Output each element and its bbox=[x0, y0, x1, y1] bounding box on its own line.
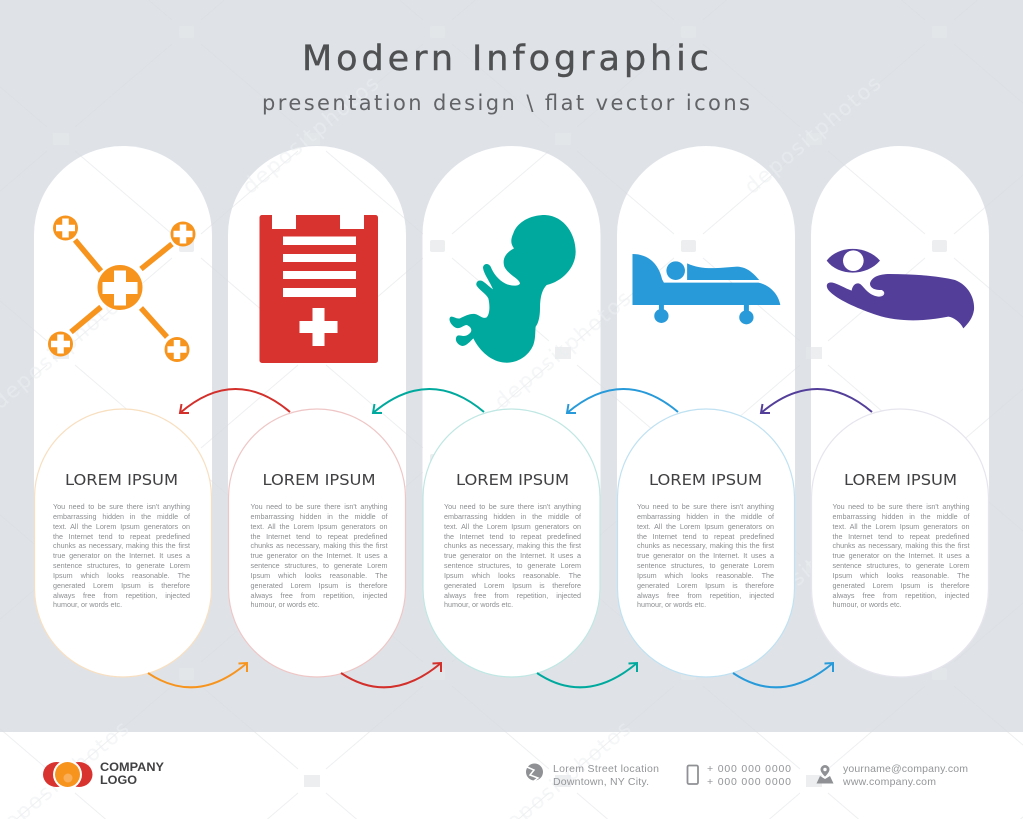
paragraph 3: humour, or words etc. bbox=[444, 600, 513, 609]
heading 5: LOREM IPSUM bbox=[844, 471, 957, 489]
arrow: teal forward bbox=[537, 663, 637, 687]
paragraph 2 bbox=[250, 502, 388, 609]
paragraph 3: the Internet tend to repeat predefined bbox=[444, 532, 581, 541]
paragraph 2: generated Lorem Ipsum is therefore bbox=[250, 581, 388, 590]
paragraph 5: humour, or words etc. bbox=[832, 600, 902, 609]
paragraph 3: Ipsum which looks reasonable. The bbox=[444, 571, 581, 580]
paragraph 1: sentence structures, to generate Lorem bbox=[53, 561, 190, 570]
paragraph 5 bbox=[832, 502, 970, 609]
paragraph 5: You need to be sure there isn't anything bbox=[832, 502, 970, 511]
text pill 5 bbox=[812, 409, 988, 677]
company logo bbox=[43, 760, 164, 789]
paragraph 1: Ipsum which looks reasonable. The bbox=[53, 571, 190, 580]
paragraph 3: sentence structures, to generate Lorem bbox=[444, 561, 581, 570]
text pill 1 bbox=[34, 409, 212, 677]
paragraph 4: the Internet tend to repeat predefined bbox=[637, 532, 774, 541]
address block: Lorem Street location bbox=[553, 763, 659, 775]
paragraph 1: humour, or words etc. bbox=[53, 600, 122, 609]
paragraph 4: sentence structures, to generate Lorem bbox=[637, 561, 774, 570]
text pill 4 bbox=[618, 409, 794, 677]
arrow: red back bbox=[180, 389, 290, 413]
text pill 2 bbox=[228, 409, 406, 677]
paragraph 5: sentence structures, to generate Lorem bbox=[832, 561, 970, 570]
text: depositphotos bbox=[740, 71, 885, 199]
paragraph 4: You need to be sure there isn't anything bbox=[637, 502, 774, 511]
arrow: orange forward bbox=[148, 663, 247, 687]
arrow: teal back bbox=[373, 389, 484, 413]
paragraph 3: true generator on the Internet. It uses a bbox=[444, 551, 581, 560]
paragraph 4: text. All the Lorem Ipsum generators on bbox=[637, 522, 774, 531]
paragraph 4: embarrassing hidden in the middle of bbox=[637, 512, 774, 521]
paragraph 2: the Internet tend to repeat predefined bbox=[250, 532, 388, 541]
heading 3: LOREM IPSUM bbox=[456, 471, 569, 489]
paragraph 4: Ipsum which looks reasonable. The bbox=[637, 571, 774, 580]
paragraph 2: You need to be sure there isn't anything bbox=[250, 502, 388, 511]
paragraph 4: humour, or words etc. bbox=[637, 600, 706, 609]
heading 4: LOREM IPSUM bbox=[649, 471, 762, 489]
panel: column 1 bbox=[34, 146, 212, 677]
paragraph 2: sentence structures, to generate Lorem bbox=[250, 561, 388, 570]
icon: medical clipboard bbox=[260, 215, 378, 363]
paragraph 2: text. All the Lorem Ipsum generators on bbox=[250, 522, 388, 531]
heading 2: LOREM IPSUM bbox=[262, 471, 376, 489]
paragraph 3: text. All the Lorem Ipsum generators on bbox=[444, 522, 581, 531]
footer band bbox=[0, 732, 1023, 819]
panel: column 3 bbox=[422, 146, 600, 677]
paragraph 2: humour, or words etc. bbox=[250, 600, 320, 609]
paragraph 5: embarrassing hidden in the middle of bbox=[832, 512, 970, 521]
paragraph 4 bbox=[637, 502, 774, 609]
title: Modern Infographic bbox=[302, 39, 709, 79]
address block: Downtown, NY City. bbox=[553, 776, 649, 788]
paragraph 3: embarrassing hidden in the middle of bbox=[444, 512, 581, 521]
paragraph 1: true generator on the Internet. It uses a bbox=[53, 551, 190, 560]
paragraph 3: You need to be sure there isn't anything bbox=[444, 502, 581, 511]
paragraph 3: chunks as necessary, making this the first bbox=[444, 541, 581, 550]
panel: column 5 bbox=[811, 146, 989, 677]
subtitle: presentation design \ flat vector icons bbox=[262, 91, 750, 115]
paragraph 2: true generator on the Internet. It uses a bbox=[250, 551, 388, 560]
paragraph 3: generated Lorem Ipsum is therefore bbox=[444, 581, 581, 590]
phone block: + 000 000 0000 bbox=[707, 776, 791, 788]
arrow: purple back bbox=[761, 389, 872, 413]
arrow: red forward bbox=[341, 663, 441, 687]
paragraph 5: chunks as necessary, making this the first bbox=[832, 541, 970, 550]
icon: medical network bbox=[48, 216, 196, 362]
text: depositphotos bbox=[740, 501, 885, 629]
paragraph 4: chunks as necessary, making this the first bbox=[637, 541, 774, 550]
paragraph 2: embarrassing hidden in the middle of bbox=[250, 512, 388, 521]
web block: yourname@company.com bbox=[843, 763, 968, 775]
paragraph 1: generated Lorem Ipsum is therefore bbox=[53, 581, 190, 590]
paragraph 5: text. All the Lorem Ipsum generators on bbox=[832, 522, 970, 531]
icon: eye over hand bbox=[827, 249, 974, 328]
paragraph 5: generated Lorem Ipsum is therefore bbox=[832, 581, 970, 590]
paragraph 2: Ipsum which looks reasonable. The bbox=[250, 571, 388, 580]
text: depositphotos bbox=[238, 501, 383, 629]
text: depositphotos bbox=[238, 71, 383, 199]
paragraph 3 bbox=[444, 502, 581, 609]
paragraph 2: always free from repetition, injected bbox=[250, 591, 388, 600]
company logo: LOGO bbox=[100, 775, 137, 787]
paragraph 1: chunks as necessary, making this the first bbox=[53, 541, 190, 550]
paragraph 1 bbox=[53, 502, 190, 609]
address block bbox=[526, 763, 659, 788]
company logo: COMPANY bbox=[100, 762, 164, 774]
heading 1: LOREM IPSUM bbox=[65, 471, 178, 489]
arrow: blue forward bbox=[733, 663, 833, 687]
paragraph 2: chunks as necessary, making this the first bbox=[250, 541, 388, 550]
web block bbox=[816, 763, 968, 788]
paragraph 5: Ipsum which looks reasonable. The bbox=[832, 571, 970, 580]
paragraph 5: always free from repetition, injected bbox=[832, 591, 970, 600]
paragraph 4: generated Lorem Ipsum is therefore bbox=[637, 581, 774, 590]
phone block: + 000 000 0000 bbox=[707, 763, 791, 775]
text pill 3 bbox=[423, 409, 600, 677]
paragraph 5: the Internet tend to repeat predefined bbox=[832, 532, 970, 541]
paragraph 1: the Internet tend to repeat predefined bbox=[53, 532, 190, 541]
arrow: blue back bbox=[567, 389, 678, 413]
icon: hospital bed bbox=[632, 254, 780, 324]
paragraph 1: text. All the Lorem Ipsum generators on bbox=[53, 522, 190, 531]
paragraph 3: always free from repetition, injected bbox=[444, 591, 581, 600]
paragraph 4: true generator on the Internet. It uses a bbox=[637, 551, 774, 560]
paragraph 5: true generator on the Internet. It uses a bbox=[832, 551, 970, 560]
panel: column 4 bbox=[617, 146, 795, 677]
phone block bbox=[688, 763, 791, 788]
paragraph 1: always free from repetition, injected bbox=[53, 591, 190, 600]
paragraph 1: You need to be sure there isn't anything bbox=[53, 502, 190, 511]
text: depositphotos bbox=[490, 286, 635, 414]
icon: fetus bbox=[449, 215, 576, 363]
paragraph 1: embarrassing hidden in the middle of bbox=[53, 512, 190, 521]
web block: www.company.com bbox=[842, 776, 936, 788]
paragraph 4: always free from repetition, injected bbox=[637, 591, 774, 600]
panel: column 2 bbox=[228, 146, 406, 677]
